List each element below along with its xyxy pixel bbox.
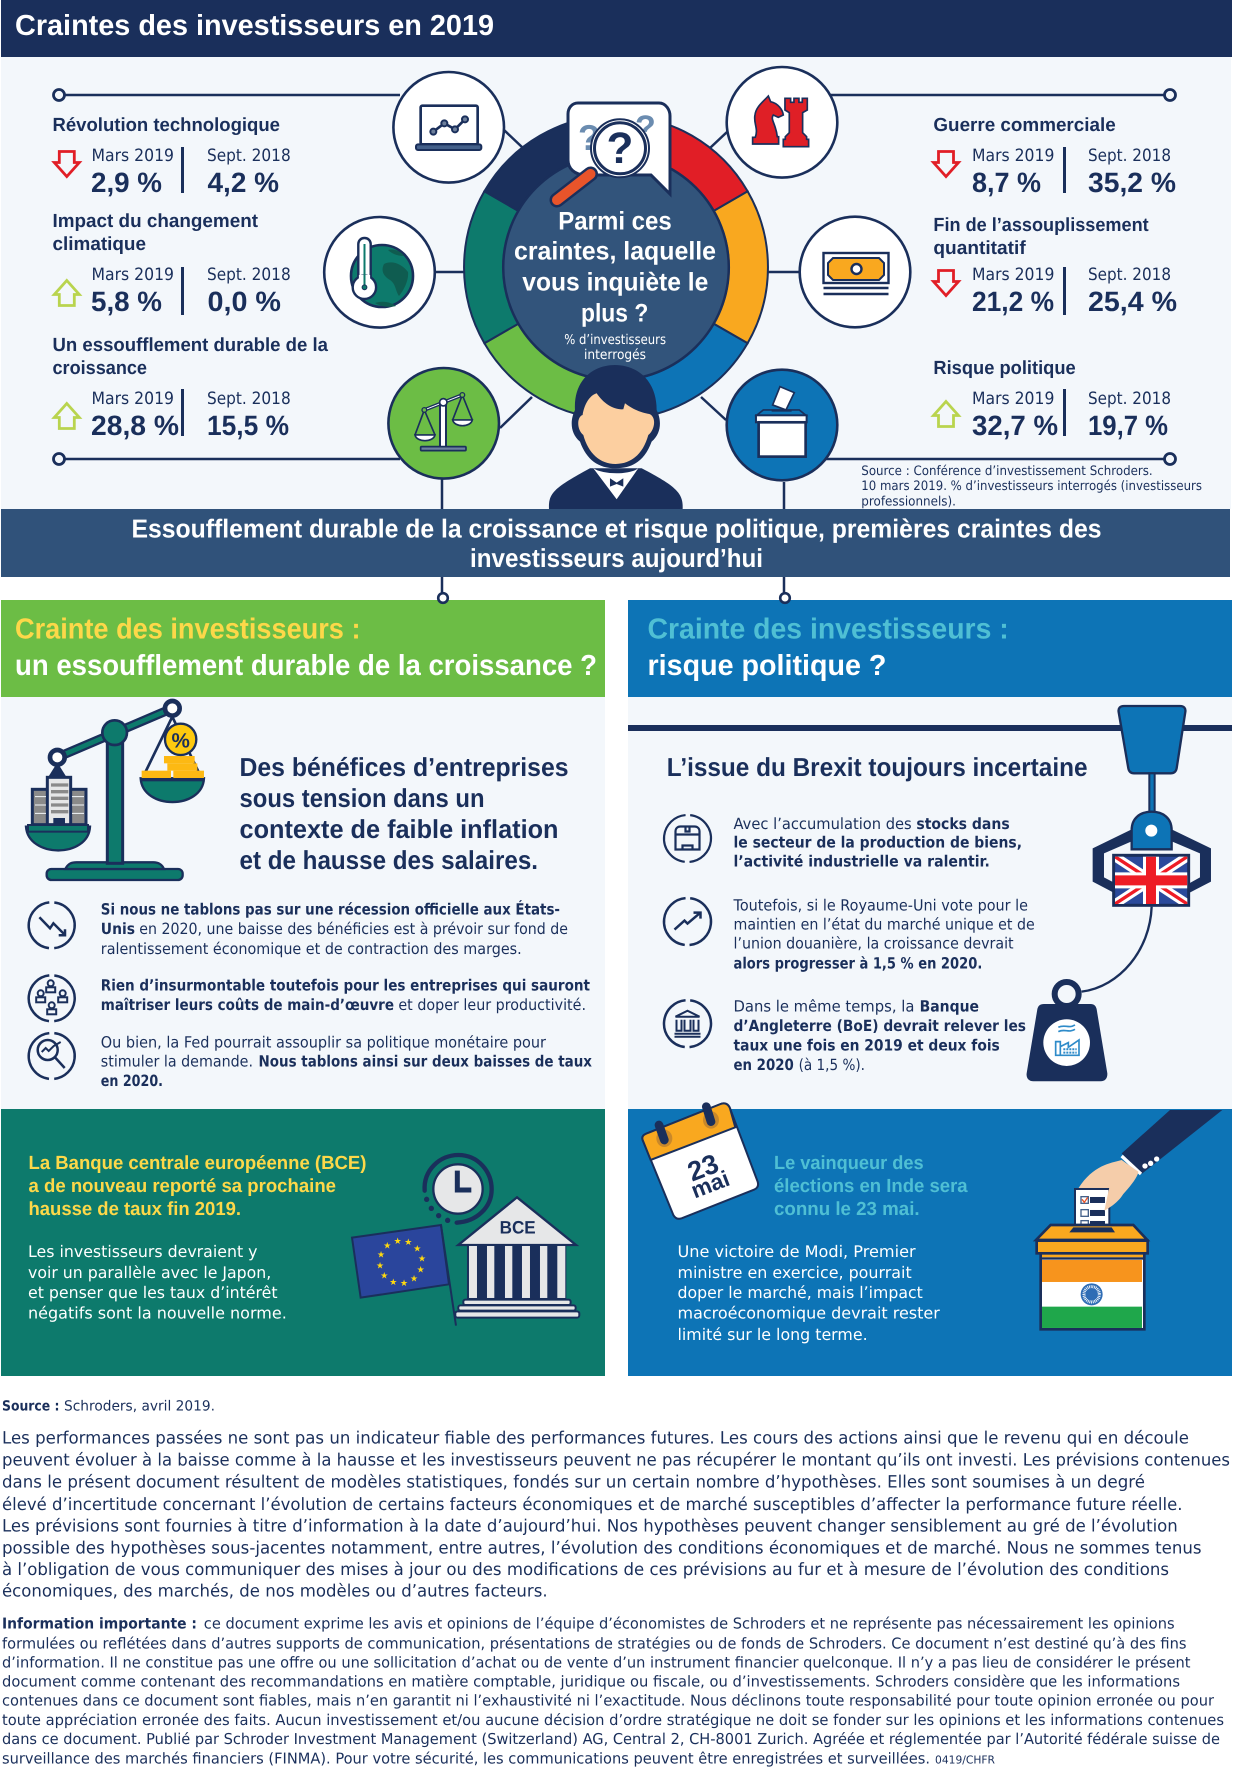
icon: speech bubble with magnifying glass [557, 103, 670, 200]
text: inventories note: le secteur de la production de biens, [734, 834, 1022, 852]
icon: clock, EU flag and bank: BCE [500, 1217, 536, 1237]
left risk: lasting growth slowdown: Sept. 2018 [207, 389, 291, 409]
text: inventories note: l’activité industrielle va ralentir. [734, 852, 990, 870]
text: fed note: Ou bien, la Fed pourrait assouplir sa politique monétaire pour [101, 1034, 547, 1052]
text: ECB headline: hausse de taux fin 2019. [28, 1199, 241, 1220]
text: Bank of England note [734, 997, 1026, 1074]
text: growth scenario note: maintien en l’état du marché unique et de [734, 915, 1035, 933]
left risk: climate change: Sept. 2018 [207, 265, 291, 285]
donut ring chart [464, 115, 768, 419]
icon: laptop with chart [393, 72, 504, 183]
text: ECB headline: La Banque centrale européenne (BCE) [28, 1153, 366, 1174]
centre question text: interrogés [584, 347, 646, 363]
connector lines to ring and labels [54, 90, 1176, 594]
text: inventories note: Avec l’accumulation des [734, 815, 912, 833]
subheading: corporate profits: sous tension dans un [240, 783, 484, 813]
text: ECB headline: a de nouveau reporté sa prochaine [28, 1176, 336, 1197]
text: growth scenario note [733, 896, 1035, 973]
right risk: trade war: Guerre commerciale [933, 115, 1116, 136]
text: recession note: ralentissement économique et de contraction des marges. [101, 940, 522, 958]
disclaimer: important information: document comme contenant des recommandations en matière comptable, juridique ou fiscale, ou d’investissements. Schroders considère que les informations [2, 1673, 1180, 1691]
text: India headline: connu le 23 mai. [774, 1199, 920, 1220]
disclaimer: important information: Information importante : [2, 1614, 197, 1632]
text: labour costs note [101, 976, 591, 1014]
disclaimer: past performance: peuvent évoluer à la baisse comme à la hausse et les investisseurs peuvent ne pas récupérer le montant qu’ils ont investi. Les prévisions contenues [2, 1451, 1230, 1471]
icon: calendar 23 mai: 23 [683, 1148, 723, 1187]
top-left risk: technological revolution: 4,2 % [208, 167, 279, 198]
text: India body: limité sur le long terme. [678, 1325, 868, 1344]
connector end dots above the two heading panels [438, 593, 790, 603]
left risk: climate change: Mars 2019 [92, 265, 174, 285]
text: ECB body: et penser que les taux d’intérêt [28, 1283, 278, 1302]
text: fed note: stimuler la demande. [101, 1053, 253, 1071]
disclaimer: past performance: Les performances passées ne sont pas un indicateur fiable des performances futures. Les cours des actions ainsi que le revenu qui en découle [2, 1428, 1189, 1448]
panel: political risk heading [628, 600, 1232, 697]
right risk: political risk: Mars 2019 [972, 389, 1054, 409]
text: ECB body: voir un parallèle avec le Japon, [28, 1263, 271, 1282]
text: inventories note [734, 815, 1022, 870]
disclaimer: important information [2, 1614, 1224, 1767]
left risk: lasting growth slowdown: Un essoufflement durable de la [52, 335, 328, 356]
subheading: Brexit: L’issue du Brexit toujours incertaine [667, 752, 1088, 782]
disclaimer: important information: 0419/CHFR [935, 1753, 995, 1766]
centre question text: Parmi ces [558, 207, 672, 235]
icon: clock, EU flag and bank: ★★★★★★★★★★★★ [376, 1236, 426, 1288]
text: ECB headline [28, 1153, 366, 1220]
text: Bank of England note: taux une fois en 2019 et deux fois [734, 1037, 1000, 1055]
text: ECB body: négatifs sont la nouvelle norme. [28, 1304, 287, 1322]
banner headline: Essoufflement durable de la croissance et risque politique, premières craintes des [132, 514, 1102, 544]
panel: political risk body [628, 697, 1232, 1109]
left risk: climate change [52, 211, 291, 317]
icon: bank [661, 998, 714, 1050]
survey source note: Source : Conférence d’investissement Schroders. [861, 464, 1153, 479]
left risk: lasting growth slowdown: 28,8 % [91, 410, 179, 441]
icon: falling trend [26, 900, 77, 951]
disclaimer: important information: dans ce document. Publié par Schroder Investment Management (Switzerland) AG, Central 2, CH-8001 Zurich. Agréée et réglementée par l’Autorité fédérale suisse de [2, 1730, 1220, 1748]
right risk: political risk: 32,7 % [972, 410, 1058, 441]
question marks: ? [578, 117, 600, 158]
right risk: trade war: Mars 2019 [972, 146, 1054, 166]
text: recession note [101, 900, 568, 958]
disclaimer: past performance: dans le présent document résultent de modèles statistiques, fondés sur un certain nombre d’hypothèses. Elles sont soumises à un degré [2, 1473, 1145, 1493]
text: recession note: Si nous ne tablons pas sur une récession officielle aux États- [101, 900, 560, 918]
text: inventories note: stocks dans [916, 815, 1010, 833]
left risk: climate change: 5,8 % [91, 286, 162, 317]
centre question text: craintes, laquelle [514, 237, 716, 265]
right risk: end of quantitative easing: quantitatif [933, 238, 1026, 259]
panel: growth slowdown body [1, 697, 605, 1109]
disclaimer: past performance: économiques, des marchés, de nos modèles ou d’autres facteurs. [2, 1582, 548, 1602]
icon: investor figure [549, 365, 683, 509]
centre question text: % d’investisseurs [564, 332, 666, 348]
subheading: corporate profits: contexte de faible inflation [240, 814, 558, 844]
icon: earth and thermometer [324, 217, 435, 328]
panel: top background [1, 57, 1231, 509]
centre question text: vous inquiète le [522, 269, 708, 297]
subheading: corporate profits: Des bénéfices d’entreprises [240, 752, 568, 782]
text: growth scenario note: l’union douanière, la croissance devrait [734, 935, 1014, 953]
right risk: political risk: 19,7 % [1088, 410, 1168, 441]
text: India body: ministre en exercice, pourrait [678, 1263, 912, 1282]
left risk: climate change: Impact du changement [52, 211, 259, 232]
magnifying glass: ? [607, 124, 633, 173]
icon: magnifier on chart [26, 1031, 77, 1081]
panel: political risk heading: risque politique ? [648, 650, 886, 682]
banner headline: investisseurs aujourd’hui [470, 543, 763, 573]
centre question text: plus ? [581, 300, 648, 328]
source line [2, 1399, 215, 1415]
right risk: trade war [933, 115, 1176, 198]
disclaimer: past performance: possible des hypothèses sous-jacentes notamment, entre autres, l’évolution des conditions économiques et de marché. Nous ne sommes tenus [2, 1538, 1202, 1558]
icon: hand voting in Indian flag ballot box [1036, 1110, 1222, 1329]
icon: rising trend [661, 896, 714, 948]
text: India headline: élections en Inde sera [774, 1176, 968, 1197]
text: ECB body [28, 1242, 287, 1322]
icon: ballot box [727, 370, 837, 480]
survey source note: 10 mars 2019. % d’investisseurs interrogés (investisseurs [861, 479, 1202, 494]
survey source note [861, 464, 1202, 510]
disclaimer: past performance: Les prévisions sont fournies à titre d’information à la date d’aujourd’hui. Nos hypothèses peuvent changer sensiblement au gré de l’évolution [2, 1517, 1178, 1537]
disclaimer: important information: contenues dans ce document sont fiables, mais n’en garantit ni l’exhaustivité ni l’exactitude. Nous déclinons toute responsabilité pour toute opinion erronée ou pour [2, 1692, 1215, 1710]
survey source note: professionnels). [861, 494, 956, 510]
text: growth scenario note: alors progresser à 1,5 % en 2020. [734, 955, 982, 973]
icon: calendar 23 mai [642, 1103, 758, 1219]
top-left risk: technological revolution [52, 115, 291, 198]
icon: balance scales [388, 368, 499, 479]
subheading: corporate profits [240, 752, 568, 875]
right risk: end of quantitative easing: 21,2 % [972, 286, 1054, 317]
source line: Schroders, avril 2019. [64, 1399, 215, 1415]
icon: scale with buildings and coins: % [171, 729, 190, 752]
text: fed note: en 2020. [101, 1072, 163, 1090]
left risk: lasting growth slowdown: Mars 2019 [92, 389, 174, 409]
text: ECB body: Les investisseurs devraient y [28, 1242, 258, 1261]
icon: warehouse [661, 812, 714, 865]
right risk: trade war: 8,7 % [972, 167, 1041, 198]
top-left risk: technological revolution: 2,9 % [91, 167, 162, 198]
right risk: trade war: 35,2 % [1088, 167, 1176, 198]
text: Bank of England note: Dans le même temps, la [734, 997, 914, 1015]
text: India body: Une victoire de Modi, Premier [678, 1242, 916, 1261]
right risk: end of quantitative easing: Mars 2019 [972, 265, 1054, 285]
panel: growth slowdown heading: un essoufflement durable de la croissance ? [15, 650, 597, 682]
icon: banknotes [800, 217, 910, 327]
text: Bank of England note: en 2020 [734, 1056, 794, 1074]
right risk: political risk: Risque politique [933, 358, 1076, 379]
text: labour costs note: et doper leur productivité. [398, 996, 586, 1014]
text: India body: doper le marché, mais l’impact [678, 1283, 923, 1302]
text: India body [678, 1242, 940, 1344]
right risk: end of quantitative easing: Sept. 2018 [1088, 265, 1171, 285]
disclaimer: important information: ce document exprime les avis et opinions de l’équipe d’économistes de Schroders et ne représente pas nécessairement les opinions [204, 1614, 1175, 1632]
disclaimer: important information: d’information. Il ne constitue pas une offre ou une sollicitation d’achat ou de vente d’un instrument financier quelconque. Il n’y a pas lieu de considérer le présent [2, 1653, 1191, 1671]
disclaimer: past performance [2, 1428, 1230, 1602]
icon: chess pieces [727, 67, 837, 178]
panel: growth slowdown heading: Crainte des investisseurs : [15, 614, 360, 646]
text: labour costs note: Rien d’insurmontable toutefois pour les entreprises qui sauront [101, 976, 591, 994]
icon: calendar 23 mai: mai [687, 1166, 733, 1203]
icon: people [26, 973, 77, 1024]
panel: ECB [1, 1109, 605, 1376]
subheading: corporate profits: et de hausse des salaires. [240, 845, 538, 875]
right risk: trade war: Sept. 2018 [1088, 146, 1171, 166]
panel: political risk heading: Crainte des investisseurs : [648, 614, 1009, 646]
text: fed note [101, 1034, 592, 1090]
right risk: end of quantitative easing: 25,4 % [1088, 286, 1177, 317]
left risk: climate change: climatique [52, 234, 146, 255]
icon: scale with buildings and coins [26, 701, 204, 880]
text: India headline: Le vainqueur des [774, 1153, 924, 1174]
source line: Source : [2, 1399, 60, 1415]
speech bubble [568, 103, 670, 194]
disclaimer: important information: formulées ou reflétées dans d’autres supports de communication, présentations de stratégies ou de fonds de Schroders. Ce document n’est destiné qu’à des fins [2, 1634, 1187, 1652]
title bar: Craintes des investisseurs en 2019 [15, 10, 494, 42]
panel: India elections [628, 1109, 1232, 1376]
text: Bank of England note: Banque [920, 997, 979, 1015]
title bar [1, 0, 1232, 57]
icon: crane claw, UK flag and weight [1027, 706, 1211, 1081]
text: fed note: Nous tablons ainsi sur deux baisses de taux [258, 1053, 592, 1071]
top-left risk: technological revolution: Sept. 2018 [207, 146, 291, 166]
banner headline [1, 509, 1230, 577]
left risk: lasting growth slowdown: 15,5 % [207, 410, 289, 441]
panel: growth slowdown heading [1, 600, 605, 697]
text: India headline [774, 1153, 968, 1220]
disclaimer: important information: surveillance des marchés financiers (FINMA). Pour votre sécurité, les communications peuvent être enregistrées et surveillées. [2, 1749, 930, 1767]
left risk: lasting growth slowdown: croissance [52, 358, 147, 379]
text: Bank of England note: (à 1,5 %). [799, 1056, 865, 1074]
icon: speech bubble with magnifying glass: ? [635, 109, 656, 147]
centre question text [514, 207, 716, 363]
left risk: lasting growth slowdown [52, 335, 328, 441]
text: India body: macroéconomique devrait rester [678, 1304, 940, 1322]
text: recession note: Unis [101, 920, 135, 938]
disclaimer: past performance: élevé d’incertitude concernant l’évolution de certains facteurs économiques et de marché susceptibles d’affecter la performance future réelle. [2, 1495, 1182, 1515]
text: labour costs note: maîtriser leurs coûts de main-d’œuvre [101, 996, 394, 1014]
top-left risk: technological revolution: Mars 2019 [92, 146, 174, 166]
left risk: climate change: 0,0 % [208, 286, 281, 317]
right risk: end of quantitative easing: Fin de l’assouplissement [933, 215, 1149, 236]
text: Bank of England note: d’Angleterre (BoE) devrait relever les [734, 1017, 1026, 1035]
disclaimer: important information: toute appréciation erronée des faits. Aucun investissement et/ou aucune décision d’ordre stratégique ne doit se fonder sur les opinions et les informations contenues [2, 1711, 1224, 1729]
top-left risk: technological revolution: Révolution technologique [52, 115, 280, 136]
text: growth scenario note: Toutefois, si le Royaume-Uni vote pour le [733, 896, 1028, 914]
right risk: political risk [933, 358, 1171, 441]
right risk: political risk: Sept. 2018 [1088, 389, 1171, 409]
right risk: end of quantitative easing [933, 215, 1177, 317]
text: recession note: en 2020, une baisse des bénéficies est à prévoir sur fond de [139, 920, 568, 938]
disclaimer: past performance: à l’obligation de vous communiquer des mises à jour ou des modifications de ces prévisions au fur et à mesure de l’évolution des conditions [2, 1560, 1169, 1580]
icon: clock, EU flag and bank [352, 1155, 579, 1326]
